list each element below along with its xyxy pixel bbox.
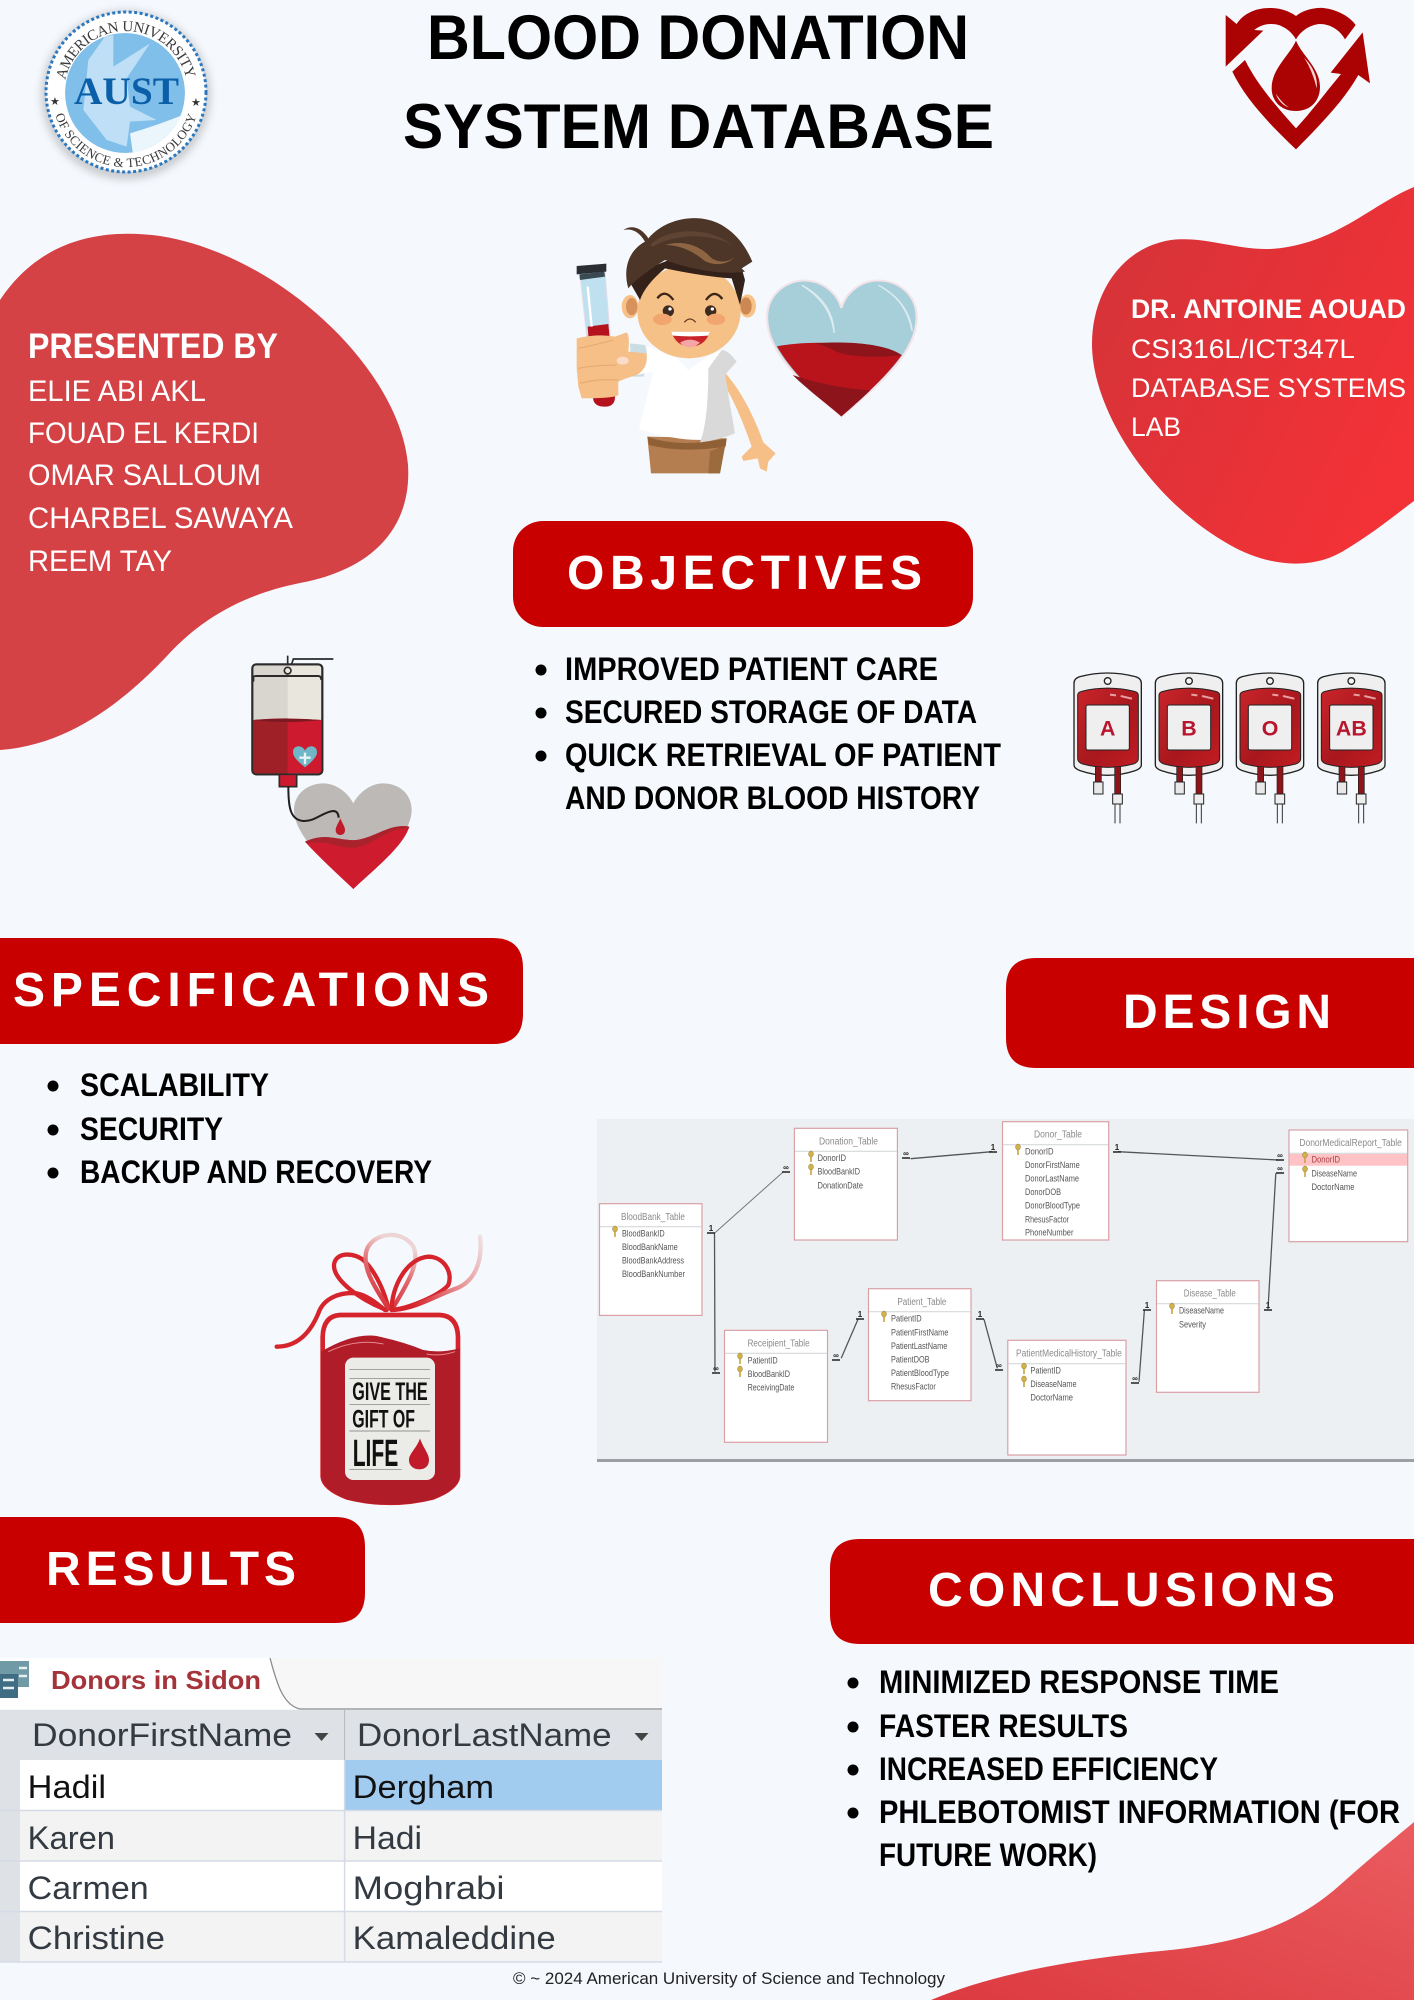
data rows: Kamaleddine: [353, 1920, 556, 1956]
table: Donor_Table: DonorLastName: [1025, 1174, 1079, 1184]
list: specifications: BACKUP AND RECOVERY: [80, 1154, 432, 1190]
title: SYSTEM DATABASE: [403, 92, 994, 162]
table: BloodBank_Table: [600, 1204, 702, 1315]
table: Donor_Table: DonorID: [1025, 1146, 1054, 1156]
list: objectives: QUICK RETRIEVAL OF PATIENT: [565, 737, 1001, 773]
bag: type A: A: [1100, 716, 1115, 740]
table: Donation_Table: DonorID: [818, 1153, 846, 1163]
heading: objectives: OBJECTIVES: [567, 547, 922, 600]
label text: LIFE: [353, 1433, 398, 1475]
table: PatientMedicalHistory_Table: DiseaseName: [1030, 1379, 1077, 1389]
cardinality markers: ∞: [1277, 1164, 1283, 1173]
text: instructor and course: LAB: [1131, 412, 1181, 442]
text: presenter names: CHARBEL SAWAYA: [28, 502, 293, 535]
bag: type O: [1236, 673, 1304, 823]
table: Disease_Table: Disease_Table: [1184, 1289, 1236, 1300]
table: Patient_Table: PatientBloodType: [891, 1368, 949, 1378]
logo: AUST university seal: [38, 6, 214, 184]
text: presenter names: ELIE ABI AKL: [28, 375, 206, 408]
heading: design: DESIGN: [1123, 986, 1331, 1039]
right arm: [722, 373, 776, 472]
table: BloodBank_Table: BloodBankID: [622, 1229, 665, 1239]
cardinality markers: ∞: [1132, 1374, 1138, 1383]
table: Patient_Table: PatientID: [891, 1314, 922, 1324]
chart: relationship diagram: [597, 1119, 1414, 1462]
data rows: Moghrabi: [353, 1870, 504, 1906]
cardinality markers: 1: [709, 1224, 714, 1233]
shirt: [630, 343, 737, 442]
trousers: [647, 437, 727, 473]
panel: instructor blob: [1092, 187, 1414, 564]
test tube: [577, 264, 615, 407]
table: DonorMedicalReport_Table: DonorID: [1312, 1155, 1340, 1165]
tab label: Donors in Sidon: [51, 1665, 261, 1695]
heading: conclusions: [830, 1539, 1414, 1644]
list: conclusions: [848, 1664, 1400, 1873]
logo: AUST university seal: OF SCIENCE & TECHNOLOGY: [56, 113, 196, 168]
bag: type B: [1155, 673, 1223, 823]
heading: specifications: [0, 938, 523, 1044]
table: Donation_Table: DonationDate: [818, 1180, 863, 1190]
table: BloodBank_Table: BloodBankNumber: [622, 1269, 685, 1279]
table: Patient_Table: Patient_Table: [897, 1297, 947, 1308]
table: Patient_Table: PatientLastName: [891, 1341, 947, 1351]
logo: AUST university seal: ★: [50, 95, 60, 108]
table: Donor_Table: Donor_Table: [1034, 1130, 1082, 1141]
data rows: Karen: [28, 1820, 115, 1856]
logo: AUST university seal: AUST: [74, 70, 179, 113]
table: Disease_Table: [1156, 1281, 1259, 1392]
icon: query tab: [0, 1661, 29, 1698]
illustration: IV blood bag dripping into heart: [252, 656, 412, 889]
list: objectives: AND DONOR BLOOD HISTORY: [565, 780, 980, 816]
list: specifications: SECURITY: [80, 1111, 223, 1147]
label text: GIFT OF: [352, 1405, 415, 1433]
list: conclusions: MINIMIZED RESPONSE TIME: [879, 1664, 1279, 1700]
table: Receipient_Table: Receipient_Table: [748, 1339, 810, 1350]
bag: type B: B: [1181, 716, 1197, 740]
bag: type A: [1074, 673, 1141, 823]
table: Receipient_Table: [724, 1330, 828, 1442]
table: Disease_Table: Severity: [1179, 1319, 1206, 1329]
table: PatientMedicalHistory_Table: DoctorName: [1030, 1393, 1073, 1403]
list: specifications: [48, 1067, 432, 1190]
illustration: blood bags by type: [1074, 673, 1385, 823]
ribbon: [277, 1235, 481, 1347]
text: instructor and course: CSI316L/ICT347L: [1131, 334, 1355, 364]
cardinality markers: 1: [1266, 1301, 1271, 1310]
cardinality markers: 1: [858, 1310, 863, 1319]
heading: results: [0, 1517, 365, 1623]
text: instructor and course: DR. ANTOINE AOUAD: [1131, 294, 1406, 324]
cardinality markers: 1: [991, 1143, 996, 1152]
cardinality markers: ∞: [903, 1149, 909, 1158]
data rows: Hadil: [28, 1769, 106, 1805]
table: Patient_Table: RhesusFactor: [891, 1382, 936, 1392]
table: Donor_Table: RhesusFactor: [1025, 1214, 1069, 1224]
illustration: boy holding blood test tube: [577, 218, 776, 473]
text: presenter names: [28, 375, 293, 578]
bag: type AB: AB: [1336, 716, 1367, 740]
table: Disease_Table: DiseaseName: [1179, 1306, 1224, 1316]
table: Donation_Table: BloodBankID: [818, 1167, 860, 1177]
table: Patient_Table: PatientFirstName: [891, 1327, 948, 1337]
header row: [0, 1710, 662, 1760]
header row: DonorLastName: [357, 1717, 612, 1753]
table: Donor_Table: DonorDOB: [1025, 1187, 1061, 1197]
table: PatientMedicalHistory_Table: [1008, 1340, 1126, 1455]
table: Donor_Table: [1002, 1122, 1109, 1240]
list: specifications: SCALABILITY: [80, 1067, 269, 1103]
list: conclusions: INCREASED EFFICIENCY: [879, 1751, 1218, 1787]
bag: type O: O: [1262, 716, 1278, 740]
bag: type AB: [1318, 673, 1385, 823]
blob: bottom right decoration: [931, 1822, 1414, 2000]
table: PatientMedicalHistory_Table: PatientMedicalHistory_Table: [1016, 1349, 1122, 1360]
cardinality markers: 1: [1115, 1143, 1120, 1152]
data rows: Carmen: [28, 1870, 149, 1906]
cardinality markers: 1: [978, 1310, 983, 1319]
text: instructor and course: DATABASE SYSTEMS: [1131, 373, 1406, 403]
cardinality markers: ∞: [833, 1351, 839, 1360]
heading: design: [1006, 958, 1414, 1068]
table: DonorMedicalReport_Table: DiseaseName: [1312, 1168, 1357, 1178]
table: Donation_Table: [794, 1128, 897, 1240]
list: objectives: IMPROVED PATIENT CARE: [565, 651, 938, 687]
list: conclusions: FUTURE WORK): [879, 1837, 1097, 1873]
list: objectives: [536, 651, 1001, 816]
list: conclusions: FASTER RESULTS: [879, 1708, 1128, 1744]
table: PatientMedicalHistory_Table: PatientID: [1030, 1365, 1061, 1375]
text: presenter names: OMAR SALLOUM: [28, 459, 261, 492]
illustration: give the gift of life blood bag: [277, 1235, 481, 1505]
table: DonorMedicalReport_Table: DoctorName: [1312, 1182, 1354, 1192]
table: donors in Sidon query result: [0, 1658, 662, 1962]
data rows: [0, 1760, 662, 1962]
table: Receipient_Table: BloodBankID: [748, 1369, 790, 1379]
data rows: Dergham: [353, 1769, 494, 1805]
text: instructor and course: [1131, 294, 1406, 442]
table: DonorMedicalReport_Table: [1289, 1130, 1408, 1242]
heading: objectives: [513, 521, 973, 627]
cardinality markers: ∞: [713, 1364, 719, 1373]
table: Donor_Table: DonorBloodType: [1025, 1201, 1080, 1211]
logo: AUST university seal: AMERICAN UNIVERSITY: [57, 21, 196, 80]
footer: copyright: © ~ 2024 American University of Science and Technology: [513, 1969, 945, 1988]
table: Donor_Table: PhoneNumber: [1025, 1228, 1074, 1238]
icon: heart with recycling arrows and blood drop: [1226, 8, 1370, 149]
list: objectives: SECURED STORAGE OF DATA: [565, 694, 977, 730]
heading: results: RESULTS: [46, 1543, 296, 1596]
table: Receipient_Table: ReceivingDate: [748, 1383, 794, 1393]
table: Donation_Table: Donation_Table: [819, 1136, 878, 1147]
data rows: Hadi: [353, 1820, 422, 1856]
label text: GIVE THE: [352, 1378, 428, 1406]
text: presenter names: FOUAD EL KERDI: [28, 417, 259, 450]
table: Donor_Table: DonorFirstName: [1025, 1160, 1080, 1170]
bag body: [321, 1315, 460, 1505]
heading: conclusions: CONCLUSIONS: [928, 1564, 1335, 1617]
data rows: Christine: [28, 1920, 165, 1956]
cardinality markers: ∞: [996, 1361, 1002, 1370]
cardinality markers: ∞: [1277, 1151, 1283, 1160]
cardinality markers: ∞: [783, 1163, 789, 1172]
title: BLOOD DONATION: [427, 3, 969, 73]
relationship lines: [714, 1152, 1278, 1382]
heading: specifications: SPECIFICATIONS: [13, 964, 489, 1017]
table: Receipient_Table: PatientID: [748, 1355, 778, 1365]
title: [403, 3, 994, 162]
table: BloodBank_Table: BloodBank_Table: [621, 1212, 685, 1223]
header row: DonorFirstName: [32, 1717, 292, 1753]
label text: [352, 1378, 428, 1475]
panel: presented by blob: [0, 234, 408, 750]
table: Patient_Table: PatientDOB: [891, 1354, 930, 1364]
cardinality markers: [707, 1143, 1284, 1383]
text: presenter names: REEM TAY: [28, 545, 172, 578]
heading: presented by: PRESENTED BY: [28, 327, 278, 366]
cardinality markers: 1: [1145, 1301, 1150, 1310]
illustration: glass heart half-filled with blood: [767, 281, 917, 416]
hand: [577, 332, 647, 398]
logo: AUST university seal: ★: [191, 96, 201, 109]
table: BloodBank_Table: BloodBankName: [622, 1242, 678, 1252]
head: [622, 218, 756, 358]
table: Patient_Table: [868, 1289, 971, 1401]
table: BloodBank_Table: BloodBankAddress: [622, 1256, 684, 1266]
